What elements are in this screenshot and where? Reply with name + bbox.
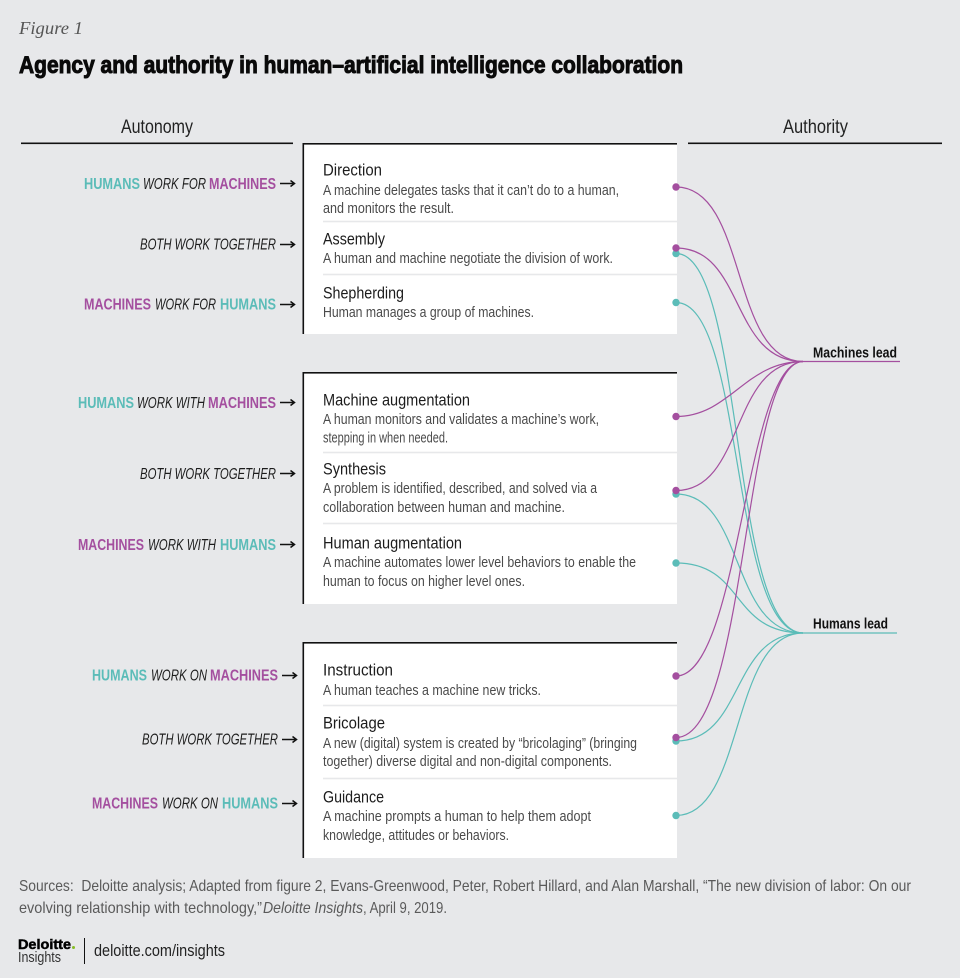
sources: evolving relationship with technology,” [19, 900, 262, 917]
connector curves: machines lead [676, 187, 900, 738]
panel: group 1: Human manages a group of machines. [323, 304, 534, 321]
autonomy label: humans work on machines: MACHINES [210, 668, 278, 684]
autonomy label: both work together: BOTH WORK TOGETHER [140, 236, 276, 254]
sources: Deloitte Insights [263, 900, 363, 917]
autonomy label: machines work on humans: MACHINES [92, 796, 158, 812]
autonomy label: humans work for machines: WORK FOR [143, 176, 206, 193]
connector dots: humans lead [672, 250, 680, 819]
column heading: Autonomy: Autonomy [121, 117, 193, 138]
panel: group 2: Machine augmentation [323, 390, 470, 410]
autonomy label: humans work on machines [92, 668, 296, 684]
autonomy label: machines work for humans [84, 296, 294, 314]
autonomy label: humans work on machines: HUMANS [92, 668, 147, 684]
autonomy label: humans work with machines: HUMANS [78, 395, 134, 412]
autonomy label: machines work with humans: MACHINES [78, 537, 144, 554]
logo: Deloitte Insights: Deloitte [18, 936, 71, 952]
sources: , April 9, 2019. [363, 900, 447, 917]
connector dots: machines lead [672, 183, 680, 741]
panel: group 3: Guidance [323, 788, 384, 806]
panel: group 2: stepping in when needed. [323, 430, 448, 446]
panel: group 3: A machine prompts a human to help them adopt [323, 808, 592, 825]
panel: group 2: A machine automates lower level behaviors to enable the [323, 554, 636, 571]
panel: group 3: Bricolage [323, 714, 385, 732]
panel: group 1: A machine delegates tasks that it can’t do to a human, [323, 182, 619, 199]
autonomy label: machines work for humans: HUMANS [220, 296, 276, 314]
logo: Deloitte Insights: Insights [18, 949, 61, 966]
panel: group 2: collaboration between human and machine. [323, 499, 565, 516]
autonomy label: humans work with machines: WORK WITH [137, 395, 205, 412]
autonomy label: humans work for machines: HUMANS [84, 176, 140, 193]
label: humans lead: Humans lead [813, 616, 888, 632]
autonomy label: machines work on humans: WORK ON [162, 796, 218, 812]
autonomy label: machines work with humans: WORK WITH [148, 537, 216, 554]
logo: Deloitte Insights [18, 936, 85, 966]
figure label: Figure 1 [18, 18, 83, 38]
panel: group 2: human to focus on higher level ones. [323, 573, 525, 590]
title: Agency and authority in human–artificial intelligence collaboration [19, 52, 683, 79]
panel: group 1: and monitors the result. [323, 200, 454, 217]
panel: group 3: together) diverse digital and non-digital components. [323, 753, 612, 770]
panel: group 1 [302, 143, 677, 334]
autonomy label: humans work for machines [84, 176, 294, 193]
panel: group 1: A human and machine negotiate the division of work. [323, 250, 613, 267]
autonomy label: both work together: BOTH WORK TOGETHER [140, 466, 276, 483]
autonomy label: both work together: BOTH WORK TOGETHER [142, 732, 278, 748]
autonomy label: machines work for humans: WORK FOR [155, 296, 216, 314]
panel: group 2: Synthesis [323, 460, 386, 478]
label: machines lead: Machines lead [813, 344, 897, 362]
panel: group 3: A new (digital) system is created by “bricolaging” (bringing [323, 735, 637, 752]
autonomy label: humans work on machines: WORK ON [151, 668, 207, 684]
panel: group 3: knowledge, attitudes or behaviors. [323, 827, 509, 844]
connector curves: humans lead [676, 254, 897, 816]
panel: group 1: Assembly [323, 230, 385, 248]
column heading: Authority: Authority [783, 117, 848, 138]
panel: group 3: A human teaches a machine new tricks. [323, 682, 541, 699]
sources [19, 878, 912, 917]
panel: group 3: Instruction [323, 660, 393, 680]
website: deloitte.com/insights [94, 941, 225, 960]
panel: group 2: A problem is identified, described, and solved via a [323, 480, 598, 497]
autonomy label: machines work for humans: MACHINES [84, 296, 151, 314]
panel: group 3 [302, 642, 677, 858]
autonomy label: machines work with humans [78, 537, 294, 554]
autonomy label: machines work with humans: HUMANS [220, 537, 276, 554]
autonomy label: humans work for machines: MACHINES [209, 176, 276, 193]
autonomy label: humans work with machines: MACHINES [208, 395, 276, 412]
panel: group 2 [302, 372, 677, 604]
autonomy label: humans work with machines [78, 395, 294, 412]
autonomy label: machines work on humans [92, 796, 296, 812]
panel: group 1: Direction [323, 160, 382, 180]
panel: group 1: Shepherding [323, 284, 404, 302]
panel: group 2: A human monitors and validates a machine’s work, [323, 411, 599, 428]
autonomy label: machines work on humans: HUMANS [222, 796, 278, 812]
panel: group 2: Human augmentation [323, 534, 462, 552]
